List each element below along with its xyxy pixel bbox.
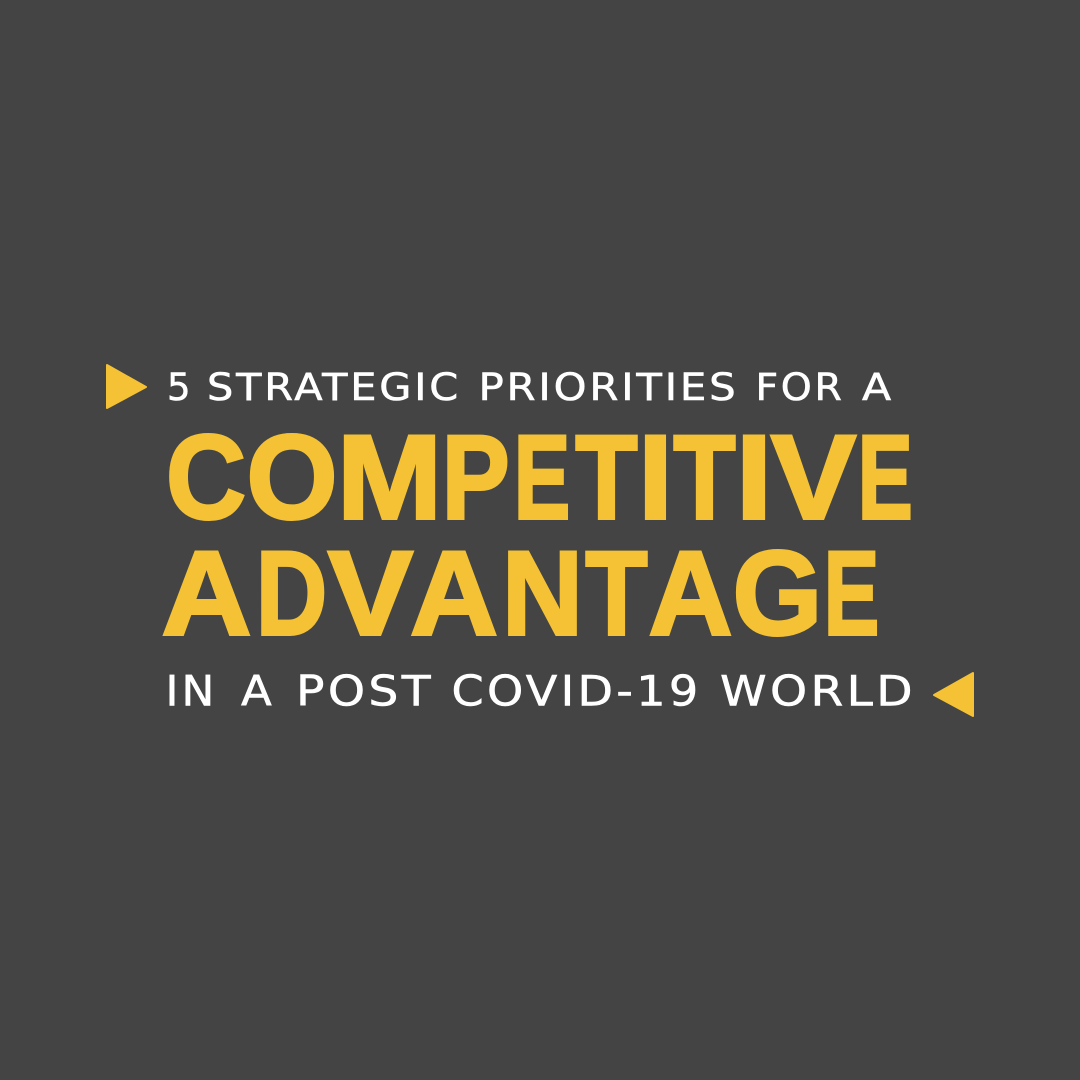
subtitle line bottom: IN xyxy=(166,666,218,716)
heading line 1: V xyxy=(771,410,856,544)
heading line 1: M xyxy=(337,410,442,544)
heading line 2: A xyxy=(410,526,498,660)
subtitle line top: 5 xyxy=(167,366,193,409)
heading line 1: C xyxy=(166,410,246,544)
subtitle line bottom: WORLD xyxy=(720,666,916,716)
subtitle line bottom: POST xyxy=(296,666,434,716)
heading line 2: E xyxy=(824,526,879,660)
heading line 2: V xyxy=(328,526,413,660)
heading line 2: A xyxy=(162,526,252,660)
subtitle line top: PRIORITIES xyxy=(478,366,738,409)
subtitle line bottom: A xyxy=(241,666,275,716)
subtitle line top: FOR xyxy=(756,366,844,409)
heading line 1: T xyxy=(673,410,736,544)
heading line 1: E xyxy=(514,410,570,544)
heading line 2: G xyxy=(733,526,822,660)
heading line 1: T xyxy=(575,410,638,544)
heading line 2: T xyxy=(585,526,648,660)
heading line 2: A xyxy=(648,526,732,660)
heading line 2: N xyxy=(502,526,583,660)
heading line 1: E xyxy=(858,410,913,544)
heading line 1: I xyxy=(736,410,772,544)
heading line 1: P xyxy=(442,410,510,544)
subtitle line bottom: COVID-19 xyxy=(452,666,702,716)
icon: right-pointing triangle xyxy=(107,365,146,408)
heading line 1: O xyxy=(246,410,338,544)
icon: left-pointing triangle xyxy=(934,673,973,716)
heading line 2: D xyxy=(256,526,327,660)
subtitle line top: STRATEGIC xyxy=(207,366,461,409)
subtitle line top: A xyxy=(862,366,894,409)
heading line 1: I xyxy=(638,410,673,544)
